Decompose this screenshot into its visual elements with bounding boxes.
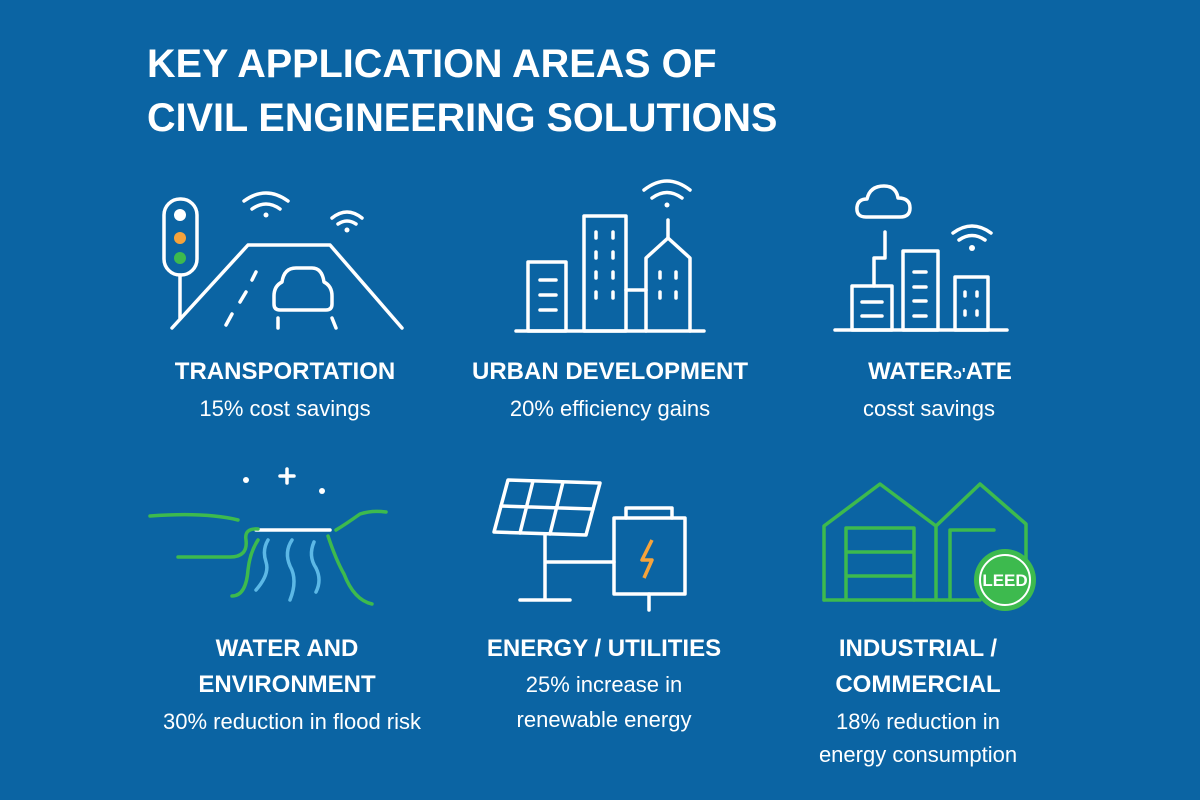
label: industrial commercial bbox=[819, 635, 1017, 767]
icon: urban development bbox=[516, 181, 704, 331]
label: watergate: cosst savings bbox=[863, 396, 995, 421]
icon: transportation bbox=[164, 193, 402, 328]
label: energy utilities: renewable energy bbox=[517, 707, 691, 732]
icon: industrial commercial bbox=[824, 484, 1036, 611]
label: urban development bbox=[472, 358, 748, 421]
label: watergate: WATERↄ'ATE bbox=[868, 358, 1012, 385]
label: watergate bbox=[863, 358, 1012, 421]
label: energy utilities: 25% increase in bbox=[526, 672, 682, 697]
title bbox=[147, 42, 777, 140]
label: energy utilities bbox=[487, 635, 721, 732]
label: energy utilities: ENERGY / UTILITIES bbox=[487, 635, 721, 662]
label: urban development: 20% efficiency gains bbox=[510, 396, 710, 421]
label: industrial commercial: 18% reduction in bbox=[836, 709, 1000, 734]
label: industrial commercial: INDUSTRIAL / bbox=[839, 635, 997, 662]
label: water and environment: 30% reduction in flood risk bbox=[163, 709, 422, 734]
title: CIVIL ENGINEERING SOLUTIONS bbox=[147, 96, 777, 140]
icon: industrial commercial: LEED bbox=[982, 571, 1028, 590]
label: water and environment: ENVIRONMENT bbox=[198, 671, 376, 698]
icon: water and environment bbox=[150, 469, 386, 604]
label: transportation bbox=[175, 358, 395, 421]
icon: watergate bbox=[835, 186, 1007, 330]
label: transportation: 15% cost savings bbox=[199, 396, 371, 421]
label: water and environment: WATER AND bbox=[216, 635, 358, 662]
title: KEY APPLICATION AREAS OF bbox=[147, 42, 717, 86]
label: industrial commercial: COMMERCIAL bbox=[835, 671, 1001, 698]
icon: energy utilities bbox=[494, 480, 685, 610]
label: water and environment bbox=[163, 635, 422, 734]
label: industrial commercial: energy consumption bbox=[819, 742, 1017, 767]
label: urban development: URBAN DEVELOPMENT bbox=[472, 358, 748, 385]
label: transportation: TRANSPORTATION bbox=[175, 358, 395, 385]
